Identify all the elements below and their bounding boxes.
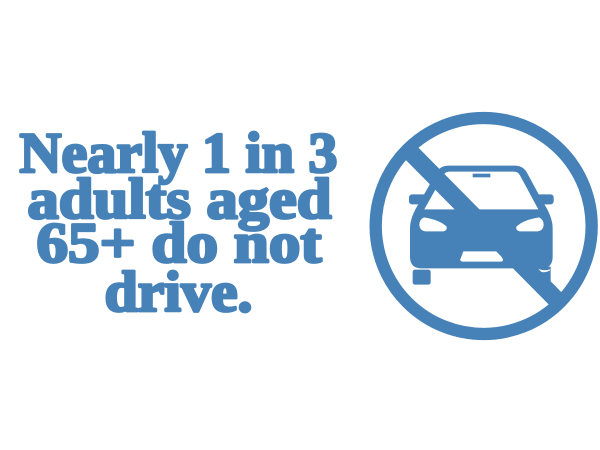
car left wheel — [413, 270, 431, 285]
car windshield — [424, 172, 538, 209]
car headlights — [419, 217, 544, 231]
title: Nearly 1 in 3 adults aged 65+ do not drive — [20, 122, 338, 324]
wheel notch — [538, 269, 550, 272]
windshield tab — [473, 174, 490, 177]
prohibition ring and slash — [376, 118, 592, 334]
title: Nearly 1 in 3 adults aged 65+ do not drive: Nearly 1 in 3 — [20, 122, 338, 185]
title: Nearly 1 in 3 adults aged 65+ do not drive: adults aged — [28, 168, 332, 231]
car body — [410, 166, 553, 268]
car mirrors — [409, 194, 554, 204]
title: Nearly 1 in 3 adults aged 65+ do not drive: drive. — [104, 261, 252, 324]
car number plate — [460, 251, 503, 262]
car right wheel — [527, 267, 551, 295]
title: Nearly 1 in 3 adults aged 65+ do not drive: 65+ do not — [36, 212, 322, 275]
icon: no driving symbol — [376, 118, 592, 334]
